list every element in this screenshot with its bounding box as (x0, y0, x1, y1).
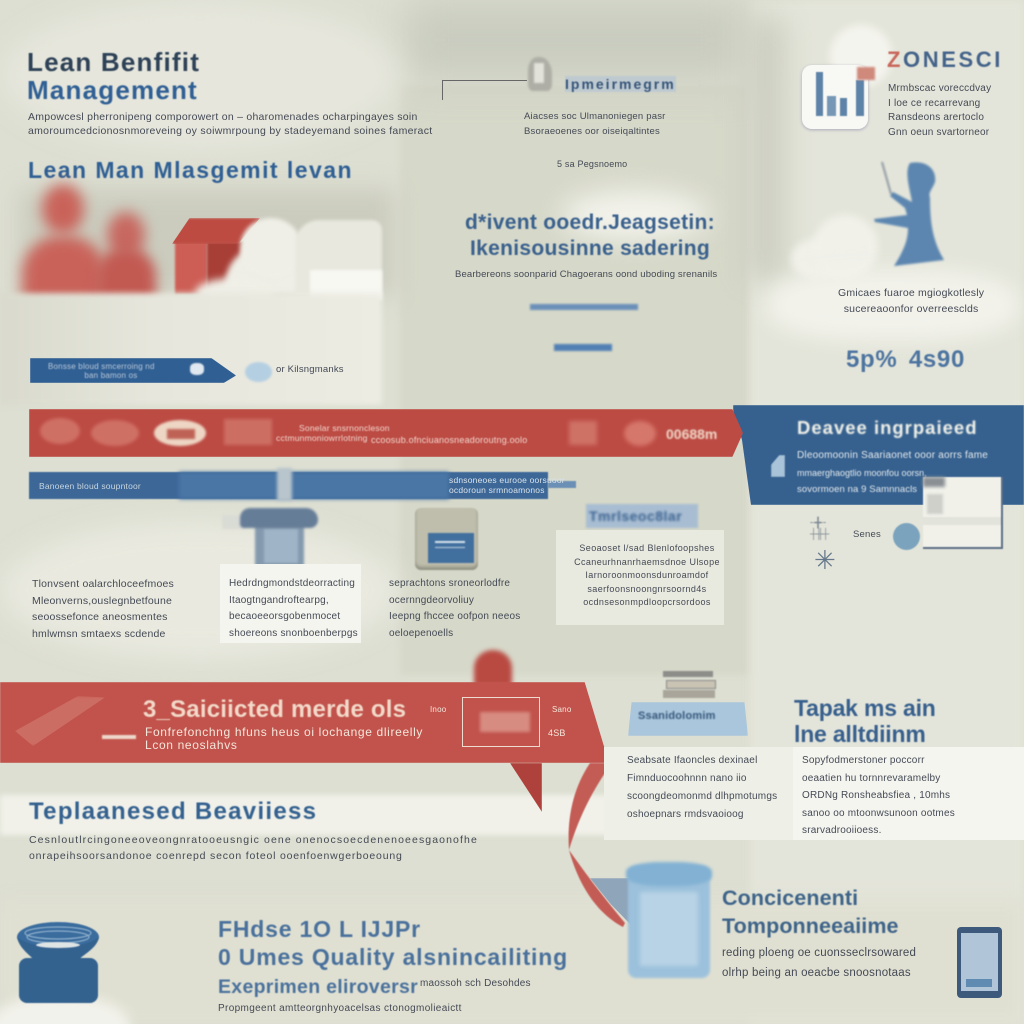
title: Lean Benfifit (27, 47, 200, 77)
label plate: Ssanidolomim (638, 710, 716, 722)
blue arrow label: ban bamon os (84, 371, 137, 380)
right small icons: Senes (853, 529, 881, 540)
icon: tablet (957, 927, 1002, 998)
top right: cloud, chart icon and logo: ZONESCI (887, 47, 1003, 72)
center heading: d*ivent ooedr.Jeagsetin: (465, 211, 715, 234)
right text panel (793, 747, 1024, 840)
center small label: 5 sa Pegsnoemo (557, 159, 627, 169)
blue figure (873, 160, 945, 268)
top center icon and heading: Ipmeirmegrm (565, 76, 676, 92)
section heading: lean man: Lean Man Mlasgemit levan (28, 157, 353, 183)
red blob (474, 650, 512, 686)
template text: Cesnloutlrcingoneeoveongnratooeusngic oene onenocsoecdenenoeesgaonofhe (29, 834, 478, 846)
middle text panel: Fimnduocoohnnn nano iio (627, 773, 747, 784)
column 2 text: Hedrdngmondstdeorracting (229, 578, 355, 589)
label box (586, 504, 698, 528)
column 4 text (556, 530, 724, 625)
top right text (888, 83, 992, 138)
center heading (465, 211, 715, 260)
right blue band (733, 405, 1024, 505)
column 4 text: Seoaoset l/sad Blenlofoopshes (579, 543, 715, 553)
right text panel: sanoo oo mtoonwsunoon ootmes (802, 808, 955, 818)
right small icons (810, 516, 920, 575)
red ribbon banner: 3_Saiciicted merde ols (143, 696, 406, 723)
right caption: Gmicaes fuaroe mgiogkotlesly (838, 287, 984, 299)
right blue band: Deavee ingrpaieed (797, 417, 978, 438)
center text (524, 111, 666, 137)
column 3 text: ocernngdeorvoliuy (389, 594, 474, 606)
red ribbon banner: Inoo (430, 705, 446, 714)
illustration: red figures and house (12, 174, 384, 299)
right text panel: Sopyfodmerstoner poccorr (802, 755, 925, 766)
book stack icon (662, 670, 717, 699)
laptop screen (923, 477, 1003, 549)
column 4 text: saerfoonsnoongnrsoornd4s (587, 584, 707, 594)
bottom heading: 0 Umes Quality alsnincailiting (218, 944, 568, 970)
red band: ccoosub.ofnciuanosneadoroutng.oolo (371, 435, 527, 445)
template heading: Teplaanesed Beaviiess (29, 798, 317, 825)
middle text panel: oshoepnars rmdsvaoioog (627, 809, 744, 820)
bottom heading: Exeprimen eliroversr (218, 976, 418, 998)
bottom text: Propmgeent amtteorgnhyoacelsas ctonogmolieaictt (218, 1003, 462, 1014)
column 2 text (220, 564, 361, 643)
right text panel: srarvadrooiioess. (802, 825, 882, 836)
center caption: Bearbereons soonparid Chagoerans oond uboding srenanils (455, 269, 717, 280)
label: blue arrow caption: or Kilsngmanks (276, 364, 344, 375)
bottom right text: olrhp being an oeacbe snoosnotaas (722, 967, 911, 979)
column 4 text: Iarnoroonmoonsdunroamdof (585, 570, 709, 580)
label plate (628, 702, 748, 736)
top right: cloud, chart icon and logo (800, 24, 1003, 132)
template text (29, 834, 478, 862)
column 4 text: ocdnsesonmpdloopcrsordoos (583, 597, 711, 607)
red band: cctmunmoniowrrlotning (276, 433, 368, 443)
blue bar (28, 466, 577, 503)
blue bar: ocdoroun srmnoamonos (449, 485, 545, 495)
bottom heading (218, 916, 568, 998)
intro text (28, 111, 432, 137)
top center icon and heading (442, 56, 676, 100)
icon: blue spool (16, 921, 100, 1004)
bottom right text: reding ploeng oe cuonsseclrsowared (722, 947, 916, 959)
fax icon (222, 506, 320, 564)
bottom heading: FHdse 1O L IJJPr (218, 916, 421, 942)
middle text panel (604, 747, 794, 840)
template text: onrapeihsoorsandonoe coenrepd secon foteol ooenfoenwgerboeoung (29, 850, 403, 862)
right text panel: oeaatien hu tornnrevaramelby (802, 772, 940, 784)
intro text: Ampowcesl pherronipeng comporowert on – oharomenades ocharpingayes soin (28, 111, 418, 123)
intro text: amoroumcedcionosnmoreveing oy soiwmrpoung by stadeyemand soines fameract (28, 125, 432, 137)
title (27, 47, 200, 106)
right blue band: mmaerghaogtlio moonfou oorsn, (797, 468, 927, 478)
red ribbon banner: Fonfrefonchng hfuns heus oi lochange dlireelly (145, 725, 423, 739)
column 2 text: Itaogtngandroftearpg, (229, 594, 329, 606)
right caption: sucereaoonfor overreesclds (844, 303, 979, 315)
column 1 text: hmlwmsn smtaexs scdende (32, 628, 166, 640)
bottom small text on heading line: maossoh sch Desohdes (420, 978, 531, 989)
column 3 text (389, 578, 520, 638)
center text: Aiacses soc Ulmanoniegen pasr (524, 111, 666, 122)
right stats: 5p% 4s90 (846, 346, 965, 373)
column 1 text: seoossefonce aneosmentes (32, 611, 168, 623)
center text: Bsoraeoenes oor oiseiqaltintes (524, 126, 660, 137)
middle text panel: Seabsate Ifaoncles dexinael (627, 755, 758, 766)
column 3 text: seprachtons sroneorlodfre (389, 578, 510, 589)
top right text: Gnn oeun svartorneor (888, 126, 989, 138)
middle text panel: scoongdeomonmd dlhpmotumgs (627, 791, 777, 802)
red ribbon tail (568, 762, 626, 928)
red ribbon banner (0, 682, 604, 812)
blue bar: sdnsoneoes eurooe oorsuoor (449, 475, 565, 485)
red band: 00688m (666, 426, 717, 442)
center heading: Ikenisousinne sadering (470, 237, 710, 260)
column 3 text: oeloepenoells (389, 628, 453, 638)
right small icons: ✳ (814, 545, 836, 575)
bottom right heading (722, 886, 899, 938)
icon: small cloud badge (245, 362, 272, 382)
column 3 text: Ieepng fhccee oofpon neeos (389, 611, 520, 622)
bottom right text (722, 947, 916, 979)
right blue band: Dleoomoonin Saariaonet ooor aorrs fame (797, 450, 988, 461)
top right text: Mrmbscac voreccdvay (888, 83, 991, 94)
red band (29, 409, 743, 457)
label box: Tmrlseoc8lar (589, 508, 682, 524)
cloud behind figure (768, 215, 1018, 340)
center bars (528, 302, 640, 352)
blue arrow label: Bonsse bloud smcerroing nd (48, 362, 155, 371)
top right text: I loe ce recarrevang (888, 98, 980, 108)
right text panel: ORDNg Ronsheabsfiea , 10mhs (802, 790, 950, 801)
right small icons: ┼╫┼ (810, 529, 828, 540)
column 4 text: Ccaneurhnanrhaemsdnoe Ulsope (574, 556, 720, 566)
column 1 text: Mleonverns,ouslegnbetfoune (32, 594, 172, 606)
blue arrow label (30, 358, 236, 383)
title: Management (27, 75, 198, 105)
right heading (794, 695, 936, 747)
red ribbon banner: Sano (552, 705, 571, 714)
right small icons: ╌╋╌ (810, 518, 825, 529)
box icon (414, 508, 479, 571)
bottom right heading: Concicenenti (722, 886, 858, 910)
column 2 text: shoereons snonboenberpgs (229, 628, 358, 638)
blue jar (590, 860, 714, 980)
column 1 text: Tlonvsent oalarchloceefmoes (32, 578, 174, 590)
bottom right heading: Tomponneeaiime (722, 914, 899, 938)
column 1 text (32, 578, 174, 640)
cloud band under illustration (0, 293, 382, 405)
column 2 text: becaoeeorsgobenmocet (229, 611, 340, 622)
top right text: Ransdeons arertoclo (888, 112, 984, 123)
right heading: lne alltdiinm (794, 721, 926, 747)
blue bar: Banoeen bloud soupntoor (39, 481, 141, 491)
red ribbon banner: 4SB (548, 728, 566, 738)
right caption (838, 287, 984, 315)
red band: Sonelar snsrnoncleson (299, 423, 390, 433)
red ribbon banner: Lcon neoslahvs (145, 738, 238, 752)
right heading: Tapak ms ain (794, 695, 936, 721)
right blue band: sovormoen na 9 Samnnacls (797, 484, 917, 495)
